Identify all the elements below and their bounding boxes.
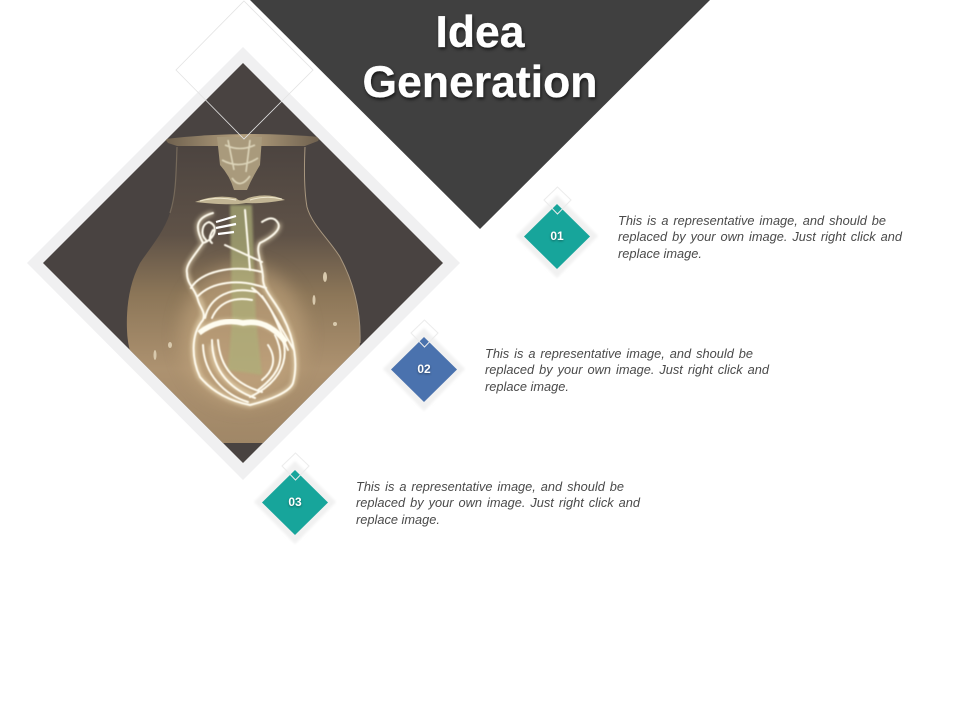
green core xyxy=(228,205,262,375)
marker 02 diamond xyxy=(383,320,465,411)
glass specks xyxy=(154,272,337,360)
text block 02: This is a representative image, and should be xyxy=(485,346,753,360)
title: Idea xyxy=(435,8,525,57)
text block 02: replace image. xyxy=(485,378,569,394)
text block 02 xyxy=(485,346,770,394)
filament hot band xyxy=(199,321,286,342)
stem xyxy=(217,137,262,190)
text block 02: replaced by your own image. Just right click and xyxy=(485,362,769,377)
diagram artwork xyxy=(28,0,710,542)
bulb left rim xyxy=(170,147,177,213)
glow xyxy=(181,265,305,405)
number 02: 02 xyxy=(417,362,431,376)
image frame xyxy=(27,47,460,480)
text block 03 xyxy=(356,478,640,526)
number 03: 03 xyxy=(288,495,302,509)
text block 01: This is a representative image, and should be xyxy=(618,212,886,228)
collar xyxy=(165,134,320,146)
bulb glass xyxy=(127,146,360,443)
dark title triangle xyxy=(250,0,710,229)
text block 03: This is a representative image, and should be xyxy=(356,478,624,494)
title: Generation xyxy=(363,58,597,107)
text block 01: replaced by your own image. Just right click and xyxy=(618,229,902,244)
text block 03: replaced by your own image. Just right click and xyxy=(356,495,640,510)
marker 03 diamond xyxy=(254,453,336,544)
text block 03: replace image. xyxy=(356,512,440,526)
text block 01: replace image. xyxy=(618,246,702,260)
number 01: 01 xyxy=(550,229,564,243)
filament xyxy=(187,210,295,405)
filament glow xyxy=(187,213,295,405)
light bulb image xyxy=(40,60,450,470)
filament highlights xyxy=(216,216,236,234)
thin outline diamond xyxy=(176,1,313,139)
title xyxy=(363,8,597,107)
stem wings xyxy=(195,195,285,204)
bulb rim highlight xyxy=(304,147,360,343)
text block 01 xyxy=(618,212,902,260)
marker 01 diamond xyxy=(516,187,598,278)
